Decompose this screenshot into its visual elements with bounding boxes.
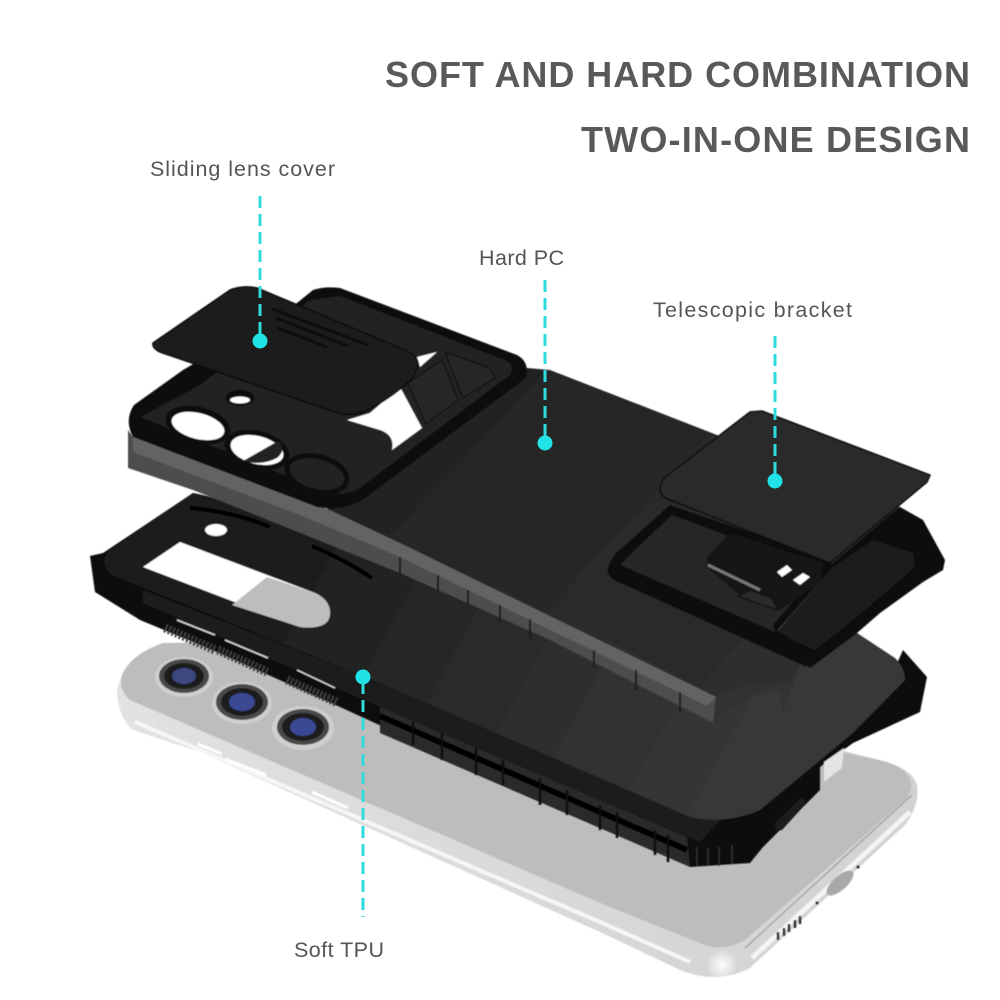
button grates xyxy=(165,620,338,703)
title: SOFT AND HARD COMBINATION xyxy=(385,54,970,95)
upper case: hard PC xyxy=(128,287,945,723)
camera tray xyxy=(129,287,527,508)
callout: Sliding lens cover: Sliding lens cover xyxy=(150,157,335,181)
callout: Soft TPU xyxy=(294,670,384,962)
lower case: soft TPU xyxy=(90,493,927,867)
right black frame xyxy=(777,507,945,668)
callout: Sliding lens cover xyxy=(150,157,335,348)
charging port cutouts xyxy=(824,748,844,782)
case ribs xyxy=(380,716,732,866)
title xyxy=(385,54,970,160)
callout: Hard PC xyxy=(479,246,564,450)
grey side band xyxy=(128,430,793,723)
window showing phone xyxy=(143,542,330,627)
title: TWO-IN-ONE DESIGN xyxy=(581,119,970,160)
callout: Soft TPU: Soft TPU xyxy=(294,938,384,962)
sliding lens cover xyxy=(153,287,418,414)
main back panel xyxy=(327,368,925,697)
callout: Telescopic bracket: Telescopic bracket xyxy=(653,298,852,322)
callout: Telescopic bracket xyxy=(653,298,852,488)
rib band xyxy=(380,707,690,867)
phone xyxy=(117,640,918,981)
callout: Hard PC: Hard PC xyxy=(479,246,564,270)
camera lenses xyxy=(155,657,334,750)
telescopic bracket xyxy=(608,411,930,667)
side buttons xyxy=(198,744,348,808)
bevel xyxy=(143,590,720,842)
bottom port details xyxy=(778,865,860,940)
case face xyxy=(104,493,905,820)
